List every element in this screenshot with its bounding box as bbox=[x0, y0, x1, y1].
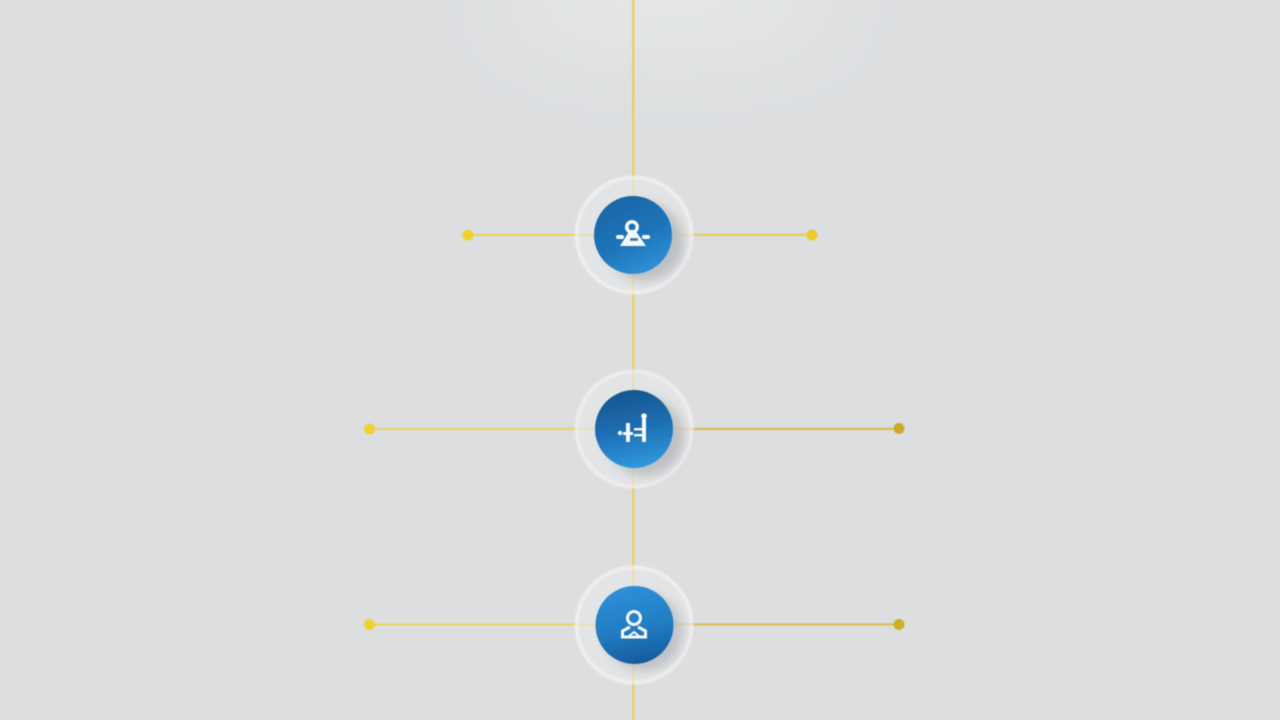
connector: row 1 bbox=[462, 230, 818, 240]
node 3 halo bbox=[576, 568, 692, 682]
icon: node 2 symbol bbox=[618, 413, 647, 442]
node 2 halo bbox=[576, 372, 692, 486]
node 3 disc bbox=[596, 586, 674, 664]
icon: node 1 symbol bbox=[616, 220, 650, 246]
connector: row 2 bbox=[364, 423, 904, 434]
node 1 shadow bbox=[606, 203, 684, 281]
node 1 halo bbox=[576, 178, 692, 292]
node 3 shadow bbox=[605, 593, 683, 671]
node 1 disc bbox=[594, 196, 672, 274]
node 2 shadow bbox=[606, 398, 684, 476]
connector: row 3 bbox=[364, 619, 904, 630]
node 2 disc bbox=[595, 390, 673, 468]
node 1 bbox=[576, 178, 692, 292]
icon: node 3 symbol bbox=[622, 612, 646, 637]
node 2 bbox=[576, 372, 692, 486]
node 3 bbox=[576, 568, 692, 682]
vertical timeline line bbox=[632, 0, 634, 720]
